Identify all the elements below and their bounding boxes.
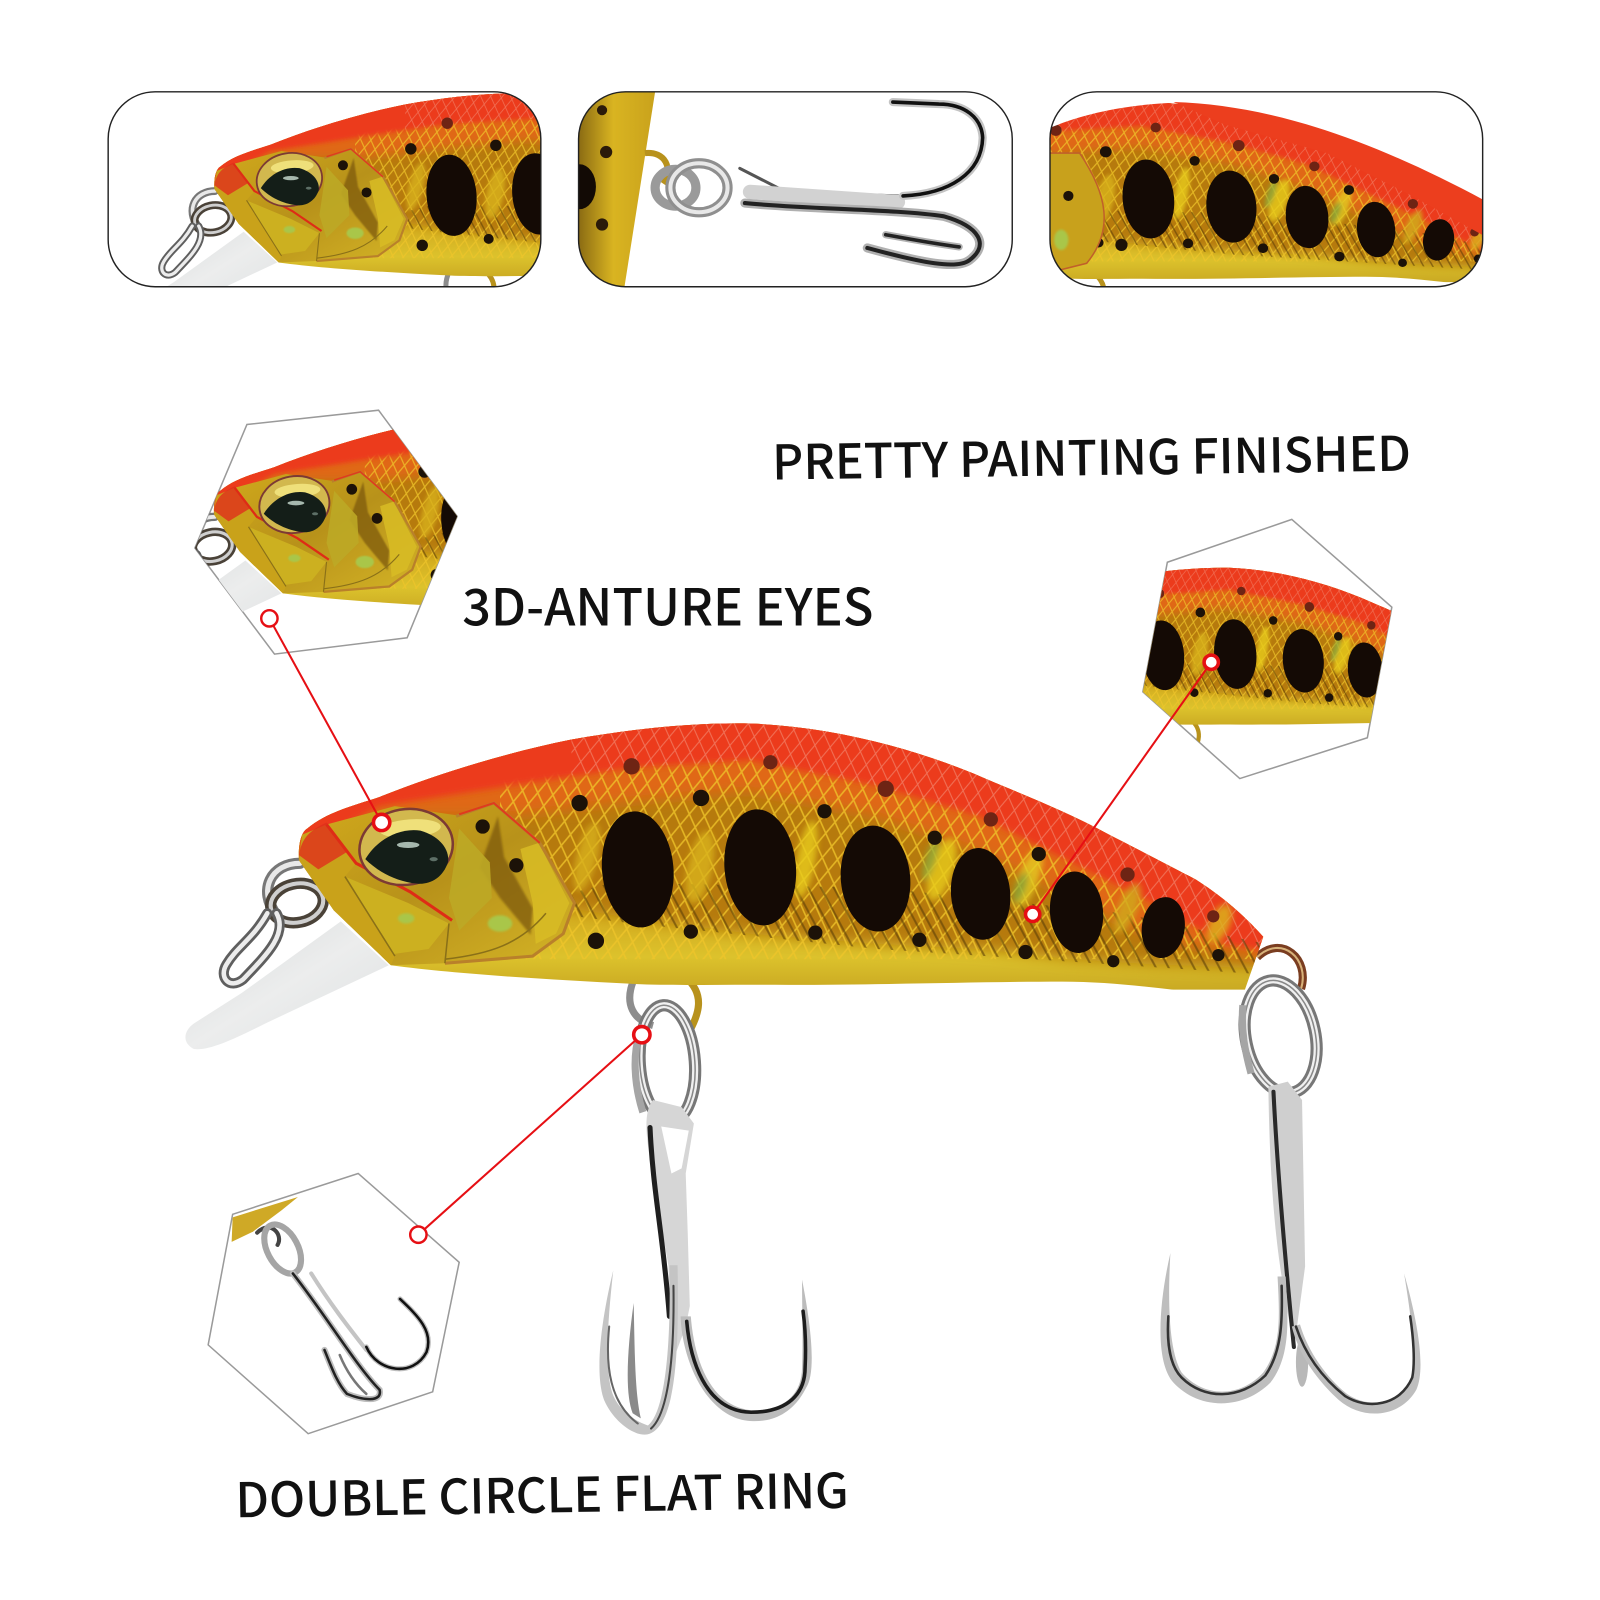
hexagon callout: ring and hook close-up: [208, 1173, 459, 1434]
hexagon callout: painted body close-up: [1142, 518, 1393, 780]
callout line: painting: [1026, 655, 1218, 921]
hexagon callout: eye close-up: [194, 409, 458, 655]
panel: body close-up: [1049, 91, 1484, 288]
heading: 3D-anture eyes: 3D-ANTURE EYES: [462, 567, 873, 641]
heading: pretty painting finished: PRETTY PAINTING FINISHED: [772, 415, 1411, 494]
belly split ring: [635, 1003, 699, 1123]
callout line: ring: [410, 1027, 650, 1243]
main lure: [185, 704, 1421, 1435]
callout line: eyes: [261, 610, 390, 831]
belly treble hook: [599, 1100, 812, 1435]
tail split ring: [1235, 974, 1326, 1100]
tail treble hook: [1160, 1082, 1421, 1414]
panel: head close-up: [107, 91, 542, 288]
panel: hook close-up: [563, 92, 1012, 287]
heading: double circle flat ring: DOUBLE CIRCLE FLAT RING: [235, 1452, 849, 1531]
